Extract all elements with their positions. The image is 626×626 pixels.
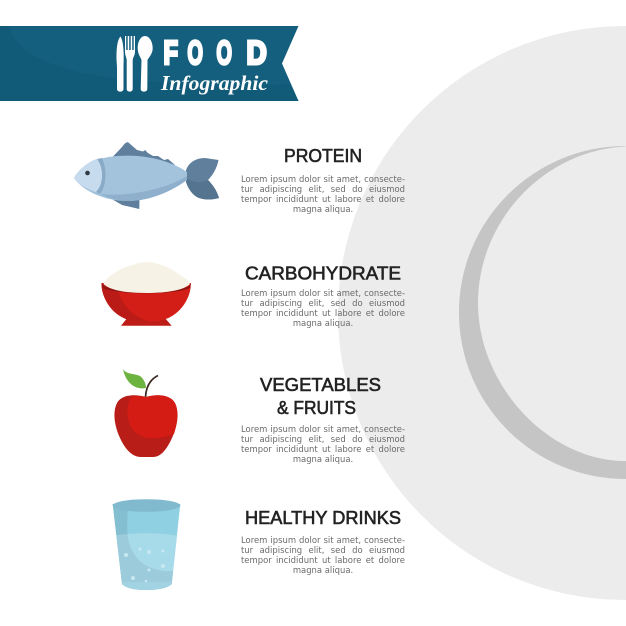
text block: carbohydrate: Lorem ipsum dolor sit amet, consecte- bbox=[241, 288, 405, 298]
text block: vegetables and fruits: tur adipiscing elit, sed do eiusmod bbox=[241, 435, 405, 445]
text block: healthy drinks: tur adipiscing elit, sed do eiusmod bbox=[241, 546, 405, 556]
text block: carbohydrate: tur adipiscing elit, sed do eiusmod bbox=[241, 299, 405, 309]
banner bbox=[0, 26, 298, 101]
heading: vegetables and fruits bbox=[260, 374, 381, 418]
plate inner crescent bbox=[459, 146, 626, 479]
heading: carbohydrate: CARBOHYDRATE bbox=[245, 262, 401, 284]
banner title: FOOD: O bbox=[216, 34, 232, 71]
banner title: FOOD: O bbox=[188, 34, 203, 71]
text block: healthy drinks: Lorem ipsum dolor sit amet, consecte- bbox=[241, 536, 405, 546]
plate bbox=[338, 26, 626, 600]
icon: rice bowl bbox=[101, 262, 191, 326]
banner title: FOOD: D bbox=[246, 35, 267, 72]
text block: carbohydrate: tempor incididunt ut labore et dolore bbox=[241, 309, 405, 319]
text block: healthy drinks bbox=[241, 536, 405, 576]
text block: protein: tur adipiscing elit, sed do eiusmod bbox=[241, 185, 405, 195]
heading: protein: PROTEIN bbox=[284, 145, 362, 166]
text block: healthy drinks: magna aliqua. bbox=[293, 566, 353, 576]
text block: protein bbox=[241, 174, 405, 215]
icon: fork knife spoon bbox=[116, 36, 153, 92]
banner subtitle: Infographic: Infographic bbox=[160, 71, 269, 95]
banner title: FOOD: F bbox=[164, 35, 178, 72]
text block: vegetables and fruits bbox=[241, 424, 405, 465]
text block: vegetables and fruits: magna aliqua. bbox=[293, 455, 353, 465]
banner title: FOOD bbox=[164, 34, 267, 72]
text block: carbohydrate: magna aliqua. bbox=[293, 319, 353, 329]
icon: glass of water bbox=[110, 498, 182, 592]
heading: vegetables and fruits: & FRUITS bbox=[277, 397, 356, 418]
icon: apple bbox=[114, 369, 178, 457]
text block: vegetables and fruits: tempor incididunt ut labore et dolore bbox=[241, 445, 405, 455]
text block: protein: Lorem ipsum dolor sit amet, consecte- bbox=[241, 174, 405, 184]
icon: fish bbox=[74, 142, 219, 209]
text block: protein: tempor incididunt ut labore et dolore bbox=[241, 195, 405, 205]
text block: carbohydrate bbox=[241, 288, 405, 329]
text block: healthy drinks: tempor incididunt ut labore et dolore bbox=[241, 556, 405, 566]
text block: vegetables and fruits: Lorem ipsum dolor sit amet, consecte- bbox=[241, 424, 405, 434]
heading: vegetables and fruits: VEGETABLES bbox=[260, 374, 381, 395]
heading: healthy drinks: HEALTHY DRINKS bbox=[245, 507, 401, 528]
text block: protein: magna aliqua. bbox=[293, 205, 353, 215]
